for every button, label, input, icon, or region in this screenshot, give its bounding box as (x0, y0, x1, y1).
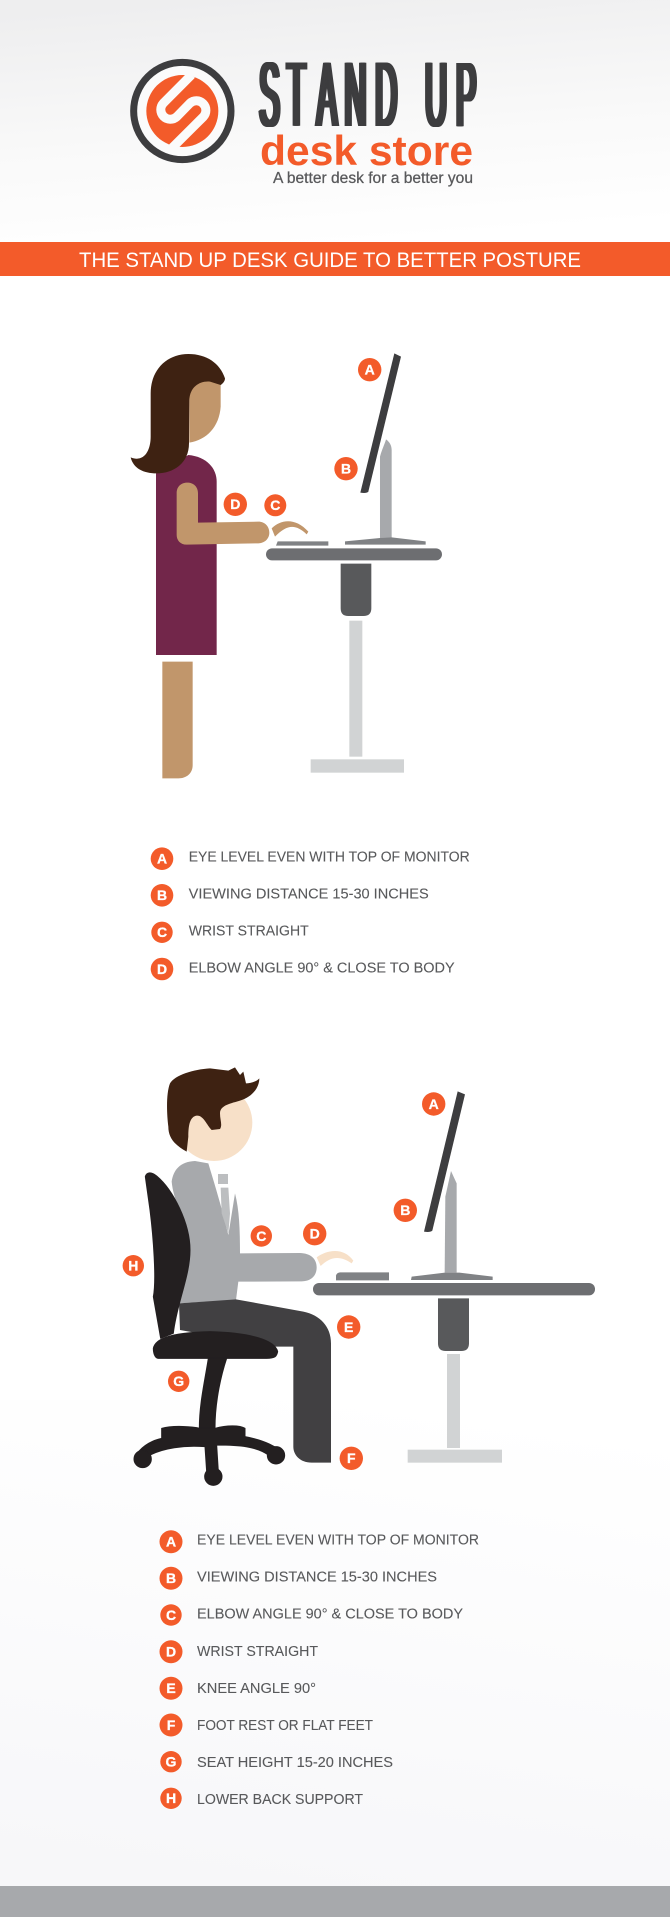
callout badges: standing: B (341, 461, 351, 477)
callout badges: seated: C (256, 1228, 266, 1244)
legend: standing: WRIST STRAIGHT (189, 924, 309, 940)
legend: standing: EYE LEVEL EVEN WITH TOP OF MONITOR (189, 849, 470, 865)
legend: seated: H (166, 1790, 176, 1806)
callout badges: seated (123, 1092, 445, 1470)
legend: standing: ELBOW ANGLE 90° & CLOSE TO BODY (189, 961, 455, 977)
header logo (134, 43, 476, 187)
legend: standing (151, 847, 470, 980)
legend: standing: D (157, 961, 167, 977)
logo wordmark: desk store: desk store (260, 127, 473, 174)
illustration: standing woman at desk (131, 353, 442, 778)
legend: standing: VIEWING DISTANCE 15-30 INCHES (189, 887, 429, 903)
legend: standing: A (157, 851, 167, 867)
logo wordmark: stand up: A (317, 43, 337, 146)
legend: seated: F (167, 1717, 176, 1733)
legend: seated: SEAT HEIGHT 15-20 INCHES (197, 1755, 393, 1771)
callout badges: standing: D (230, 496, 240, 512)
logo wordmark: stand up: S (259, 43, 280, 146)
callout badges: seated: A (429, 1096, 439, 1112)
logo wordmark: stand up: D (375, 43, 397, 146)
callout badges: seated: F (347, 1450, 356, 1466)
callout badges: standing: A (365, 362, 375, 378)
logo wordmark: stand up: U (425, 43, 447, 146)
legend: seated: C (166, 1607, 176, 1623)
title banner: THE STAND UP DESK GUIDE TO BETTER POSTURE (79, 249, 581, 272)
legend: seated: VIEWING DISTANCE 15-30 INCHES (197, 1570, 437, 1586)
legend: seated: A (166, 1534, 176, 1550)
callout badges: seated: E (344, 1319, 353, 1335)
tagline: A better desk for a better you (273, 170, 473, 187)
callout badges: seated: G (173, 1373, 184, 1389)
office chair (134, 1173, 285, 1485)
legend: seated: LOWER BACK SUPPORT (197, 1792, 363, 1808)
callout badges: seated: H (128, 1258, 138, 1274)
callout badges: standing (224, 358, 381, 516)
illustration: seated man in chair (134, 1067, 353, 1485)
legend: seated: G (166, 1754, 177, 1770)
man figure (167, 1067, 353, 1463)
logo wordmark: stand up: T (287, 43, 306, 146)
icon: logo S mark (134, 62, 231, 160)
legend: seated: KNEE ANGLE 90° (197, 1681, 316, 1697)
footer bar (0, 1886, 670, 1917)
callout badges: seated: D (310, 1226, 320, 1242)
legend: standing: C (157, 924, 167, 940)
legend: seated: E (166, 1680, 176, 1696)
callout badges: seated: B (400, 1202, 410, 1218)
title banner (0, 242, 670, 276)
legend: seated: FOOT REST OR FLAT FEET (197, 1718, 373, 1734)
legend: standing: B (157, 887, 167, 903)
legend: seated: B (166, 1570, 176, 1586)
standing desk with monitor (266, 353, 442, 773)
seated desk with monitor (313, 1091, 595, 1463)
logo wordmark: stand up: P (456, 43, 476, 146)
legend: seated: EYE LEVEL EVEN WITH TOP OF MONITOR (197, 1532, 479, 1548)
logo wordmark: stand up: N (345, 43, 366, 146)
legend: seated: ELBOW ANGLE 90° & CLOSE TO BODY (197, 1607, 463, 1623)
woman figure (131, 354, 308, 778)
legend: seated: WRIST STRAIGHT (197, 1644, 318, 1660)
callout badges: standing: C (270, 497, 280, 513)
legend: seated (160, 1530, 479, 1809)
legend: seated: D (166, 1644, 176, 1660)
